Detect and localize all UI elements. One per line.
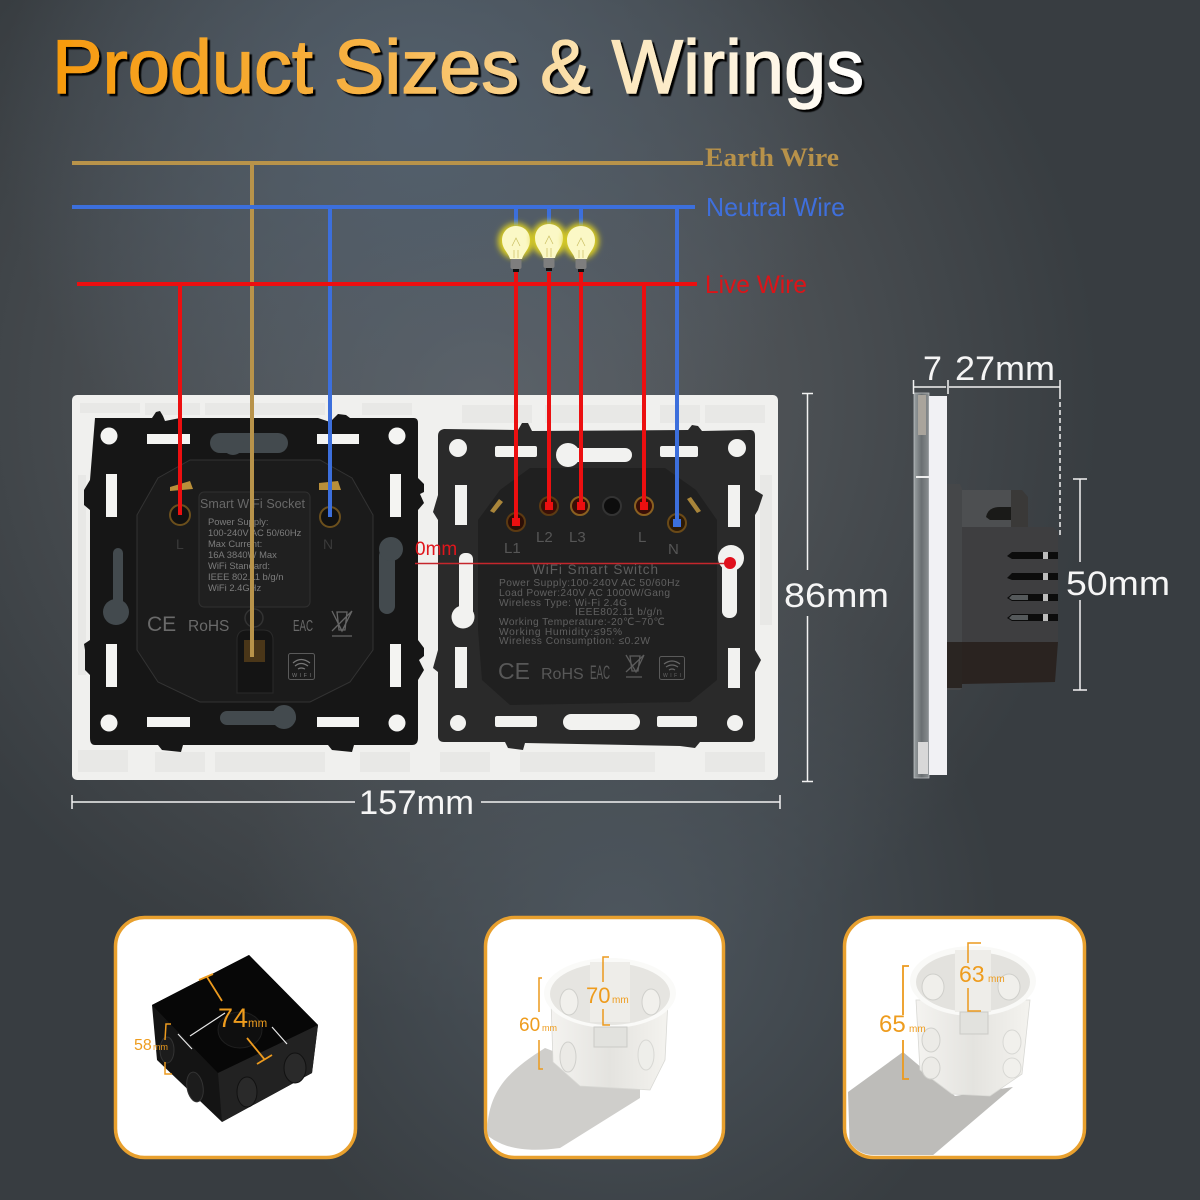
icon: light bulb 2 [531, 221, 567, 271]
socket spec text [200, 497, 306, 593]
dimension: height 50mm: 50mm [1066, 565, 1170, 603]
switch spec text [499, 562, 680, 647]
socket spec text: WiFi 2.4GHz [208, 582, 261, 593]
switch terminals: L1 [504, 540, 521, 557]
socket ground notch [237, 630, 273, 693]
panel: square wall box card [116, 918, 356, 1158]
socket spec text: 16A 3840W Max [208, 549, 277, 560]
socket certification marks [147, 609, 352, 636]
round white box [544, 958, 676, 1090]
switch certification marks [498, 655, 644, 684]
brass connector [986, 507, 1011, 520]
icon: light bulb 3 [563, 223, 599, 272]
switch terminals: L3 [569, 529, 586, 546]
panel: WiFi smart switch module [433, 423, 763, 750]
white mounting plate [929, 396, 947, 775]
socket certification marks: EAC [293, 618, 313, 635]
neutral wire [72, 207, 695, 523]
socket mounting frame [84, 411, 424, 752]
measurement: 65mm: 65 [879, 1011, 906, 1038]
shadow [848, 1052, 1013, 1156]
dimension: width 157mm [72, 784, 780, 822]
wire terminal tips [512, 502, 681, 527]
switch spec text: Power Supply:100-240V AC 50/60Hz [499, 578, 680, 589]
switch terminals: L [638, 529, 646, 546]
panel: smart WiFi socket module [84, 411, 424, 752]
panel: round 65mm wall box card [844, 918, 1084, 1158]
panel: side view of switch [914, 393, 1058, 778]
shadow [487, 1048, 640, 1150]
measurement: 60mm [519, 978, 557, 1069]
measurement: 63mm: 63 [959, 961, 985, 987]
label: neutral wire: Neutral Wire [706, 192, 845, 222]
socket terminals: N [323, 536, 333, 552]
measurement: 65mm: mm [909, 1024, 926, 1035]
measurement: 58mm: 58 [134, 1037, 152, 1054]
socket spec text: Power Supply: [208, 516, 268, 527]
measurement: module hole spacing: 0mm [415, 539, 457, 560]
socket terminals: L [176, 536, 184, 552]
switch housing [947, 484, 1058, 690]
dimension: depth 7 and 27mm [913, 350, 1060, 536]
socket spec text: Max Current: [208, 538, 262, 549]
icon: light bulb 1 [498, 223, 534, 272]
panel: back plate [72, 395, 778, 780]
switch spec text: IEEE802.11 b/g/n [575, 607, 662, 618]
switch mounting frame [433, 423, 763, 750]
switch spec text: Wireless Type: Wi-Fi 2.4G [499, 598, 627, 609]
socket label panel [199, 492, 310, 607]
label: earth wire: Earth Wire [705, 143, 839, 172]
socket terminals [170, 481, 341, 552]
switch spec text: Working Temperature:-20℃~70℃ [499, 617, 665, 628]
socket certification marks: RoHS [188, 618, 229, 635]
measurement: 65mm [879, 966, 926, 1079]
housing vents [1007, 552, 1058, 621]
measurement: 58mm [134, 1024, 172, 1074]
measurement: 70mm: mm [612, 995, 629, 1006]
measurement: 60mm: 60 [519, 1015, 540, 1036]
switch certification marks: RoHS [541, 666, 584, 683]
measurement: 70mm [586, 957, 629, 1025]
icon: socket wifi badge: WIFI [292, 673, 311, 679]
switch spec text: WiFi Smart Switch [532, 562, 658, 577]
measurement: 60mm: mm [542, 1023, 557, 1033]
dimension: width 157mm: 157mm [359, 784, 474, 822]
earth wire [72, 163, 703, 657]
switch certification marks: EAC [590, 663, 610, 684]
switch terminals: L2 [536, 529, 553, 546]
glass panel [914, 393, 929, 778]
icon: switch wifi badge [660, 656, 684, 680]
switch central body [478, 468, 717, 705]
switch spec text: Load Power:240V AC 1000W/Gang [499, 588, 670, 599]
dimension: height 86mm [784, 393, 889, 782]
measurement: 74mm: mm [248, 1018, 267, 1030]
switch spec text: Working Humidity:≤95% [499, 627, 622, 638]
switch terminals: N [668, 541, 679, 558]
measurement: 74mm [199, 974, 272, 1064]
socket central body [137, 460, 373, 702]
socket spec text: 100-240V AC 50/60Hz [208, 527, 302, 538]
measurement: 63mm [959, 943, 1005, 1011]
round white box [910, 946, 1036, 1096]
measurement: 70mm: 70 [586, 983, 610, 1008]
measurement: 74mm: 74 [218, 1003, 248, 1033]
dimension: height 86mm: 86mm [784, 577, 889, 615]
socket spec text: Smart WiFi Socket [200, 497, 306, 511]
socket certification marks: CE [147, 613, 176, 636]
switch certification marks: CE [498, 658, 530, 684]
socket spec text: WiFi Standard: [208, 560, 270, 571]
title: Product Sizes & Wirings [52, 25, 864, 110]
dimension: height 50mm [1066, 479, 1170, 690]
dimension: depth 7 and 27mm: 27mm [955, 350, 1055, 388]
panel: round 60mm wall box card [486, 918, 724, 1158]
square black box [152, 955, 318, 1122]
measurement: module hole spacing [415, 539, 736, 569]
measurement: 63mm: mm [988, 974, 1005, 985]
socket spec text: IEEE 802.11 b/g/n [208, 571, 283, 582]
icon: socket wifi badge [288, 654, 314, 680]
live wire [77, 272, 697, 522]
label: live wire: Live Wire [705, 271, 807, 299]
switch spec text: Wireless Consumption: ≤0.2W [499, 636, 650, 647]
icon: switch wifi badge: WIFI [663, 673, 681, 679]
dimension: depth 7 and 27mm: 7 [923, 350, 942, 388]
measurement: 58mm: mm [153, 1042, 168, 1052]
switch terminals [490, 497, 701, 558]
wiring diagram [72, 163, 703, 657]
